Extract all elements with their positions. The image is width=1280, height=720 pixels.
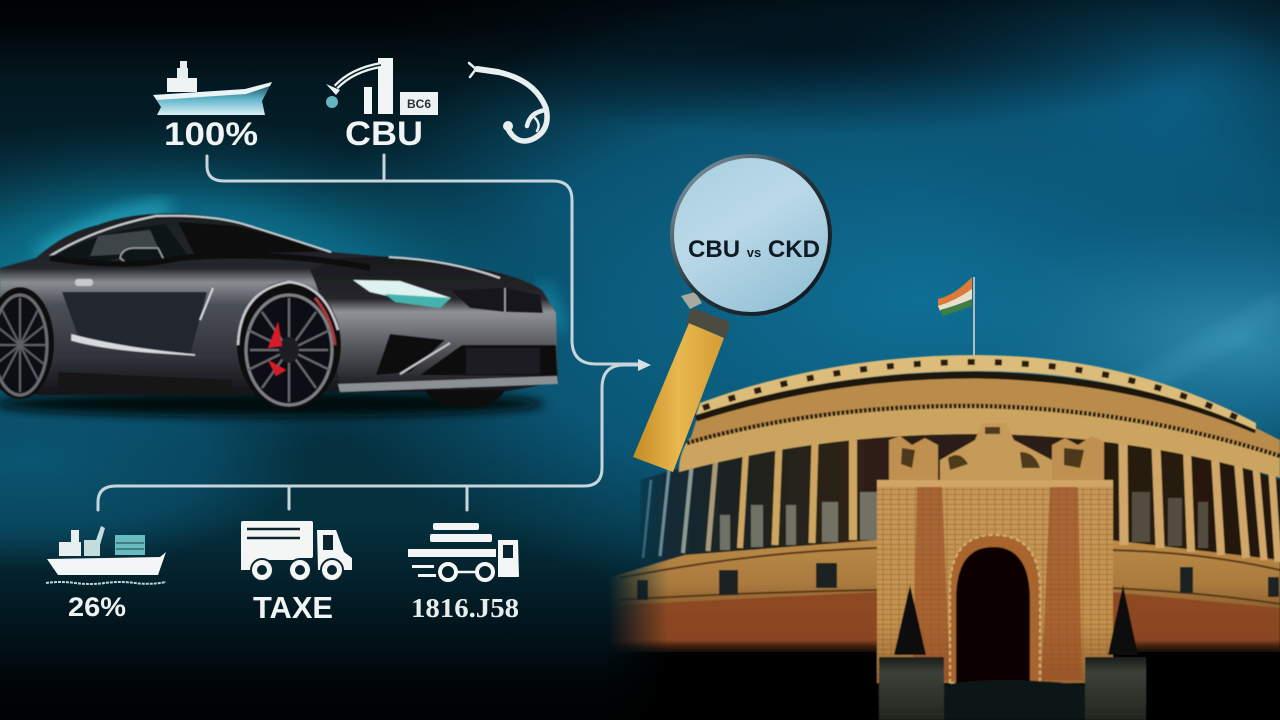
building: tower brick texture (877, 482, 1113, 683)
building: pedestal left (879, 657, 944, 720)
building: obelisk right (1108, 585, 1138, 655)
icon: flatbed truck (408, 523, 519, 580)
lower intake left (376, 334, 445, 375)
icon group: bottom row (46, 521, 519, 625)
building: tower carvings (901, 427, 1084, 470)
magnifying glass (633, 154, 832, 472)
building: left pier top (889, 436, 938, 482)
magnifier rim (670, 154, 832, 316)
building: lower wall left (612, 539, 878, 606)
label: TAXE: TAXE (253, 590, 333, 625)
building: parapet notches (703, 362, 1254, 426)
building: obelisk left (894, 585, 926, 655)
magnifier collar (681, 292, 702, 309)
flag on pole (938, 277, 974, 356)
rear wheel (0, 287, 54, 399)
arrow head (638, 359, 651, 371)
icon: factory with robot arm: BC6 (407, 97, 431, 111)
building: wall stripes (620, 548, 1280, 604)
building: arch opening (956, 547, 1030, 683)
icon group: top row (153, 58, 547, 153)
label: flatbed caption: 1816.J58 (411, 593, 519, 623)
car shadow (0, 391, 545, 417)
front right tyre (425, 390, 505, 408)
car window glass (90, 230, 160, 256)
building: terracotta base right (1110, 592, 1280, 652)
building: dark cornice (696, 375, 1256, 430)
intake trim (400, 343, 450, 374)
building: columns right (1123, 442, 1278, 562)
connector: top route into magnifier (207, 155, 640, 364)
icon: hook (469, 63, 547, 141)
side sill highlight (72, 335, 195, 355)
magnifier lens (674, 158, 828, 312)
building: central gable (940, 423, 1052, 482)
roof highlight (50, 216, 500, 278)
icon: container ship (46, 526, 166, 584)
building: terracotta base left (600, 592, 877, 652)
car (0, 214, 558, 417)
building: right pier top (1052, 436, 1104, 482)
building: tower stains (913, 485, 1082, 680)
building: wall windows (637, 563, 1279, 600)
front wheel (242, 290, 336, 410)
door panel (62, 292, 207, 356)
building: windows (720, 492, 1208, 550)
building: central tower (877, 482, 1113, 683)
building: arch surround (950, 535, 1040, 683)
magnifier text: CBU vs CKD (688, 236, 820, 263)
vent handle (200, 288, 213, 320)
icon: truck (241, 521, 352, 581)
car body (0, 214, 558, 395)
car nose (310, 257, 558, 388)
front wheel arch (237, 281, 341, 409)
building: tower cornice (877, 480, 1113, 487)
label: CBU: CBU (345, 115, 423, 153)
icon: cargo ship (153, 61, 272, 115)
building: bottom fade (0, 640, 1280, 720)
splitter (338, 376, 558, 392)
building: ornament band (687, 406, 1280, 456)
Parliament building (612, 354, 1280, 720)
building: steps (944, 680, 1085, 720)
side sill (58, 372, 232, 392)
magnifier ferrule (686, 308, 730, 338)
building: entablature (679, 402, 1280, 478)
magnifier handle (633, 323, 724, 472)
car mirror (120, 248, 165, 262)
building: frieze (690, 378, 1280, 455)
building: pedestal right (1085, 657, 1146, 720)
building: lower wall right (1110, 540, 1280, 615)
label: 100%: 100% (164, 116, 258, 152)
building: colonnade backdrop (640, 432, 1280, 570)
upper grille (451, 288, 543, 313)
building: parapet (696, 355, 1256, 430)
lower grille (420, 345, 557, 376)
connector: bottom route into magnifier (98, 365, 640, 510)
belt line shadow (50, 256, 370, 268)
headlight (353, 280, 451, 303)
door handle (75, 279, 93, 286)
label: 26%: 26% (68, 592, 126, 622)
icon: factory with robot arm (326, 58, 438, 115)
building: columns left (643, 437, 853, 558)
car side windows (52, 224, 190, 264)
car windscreen (178, 222, 320, 258)
